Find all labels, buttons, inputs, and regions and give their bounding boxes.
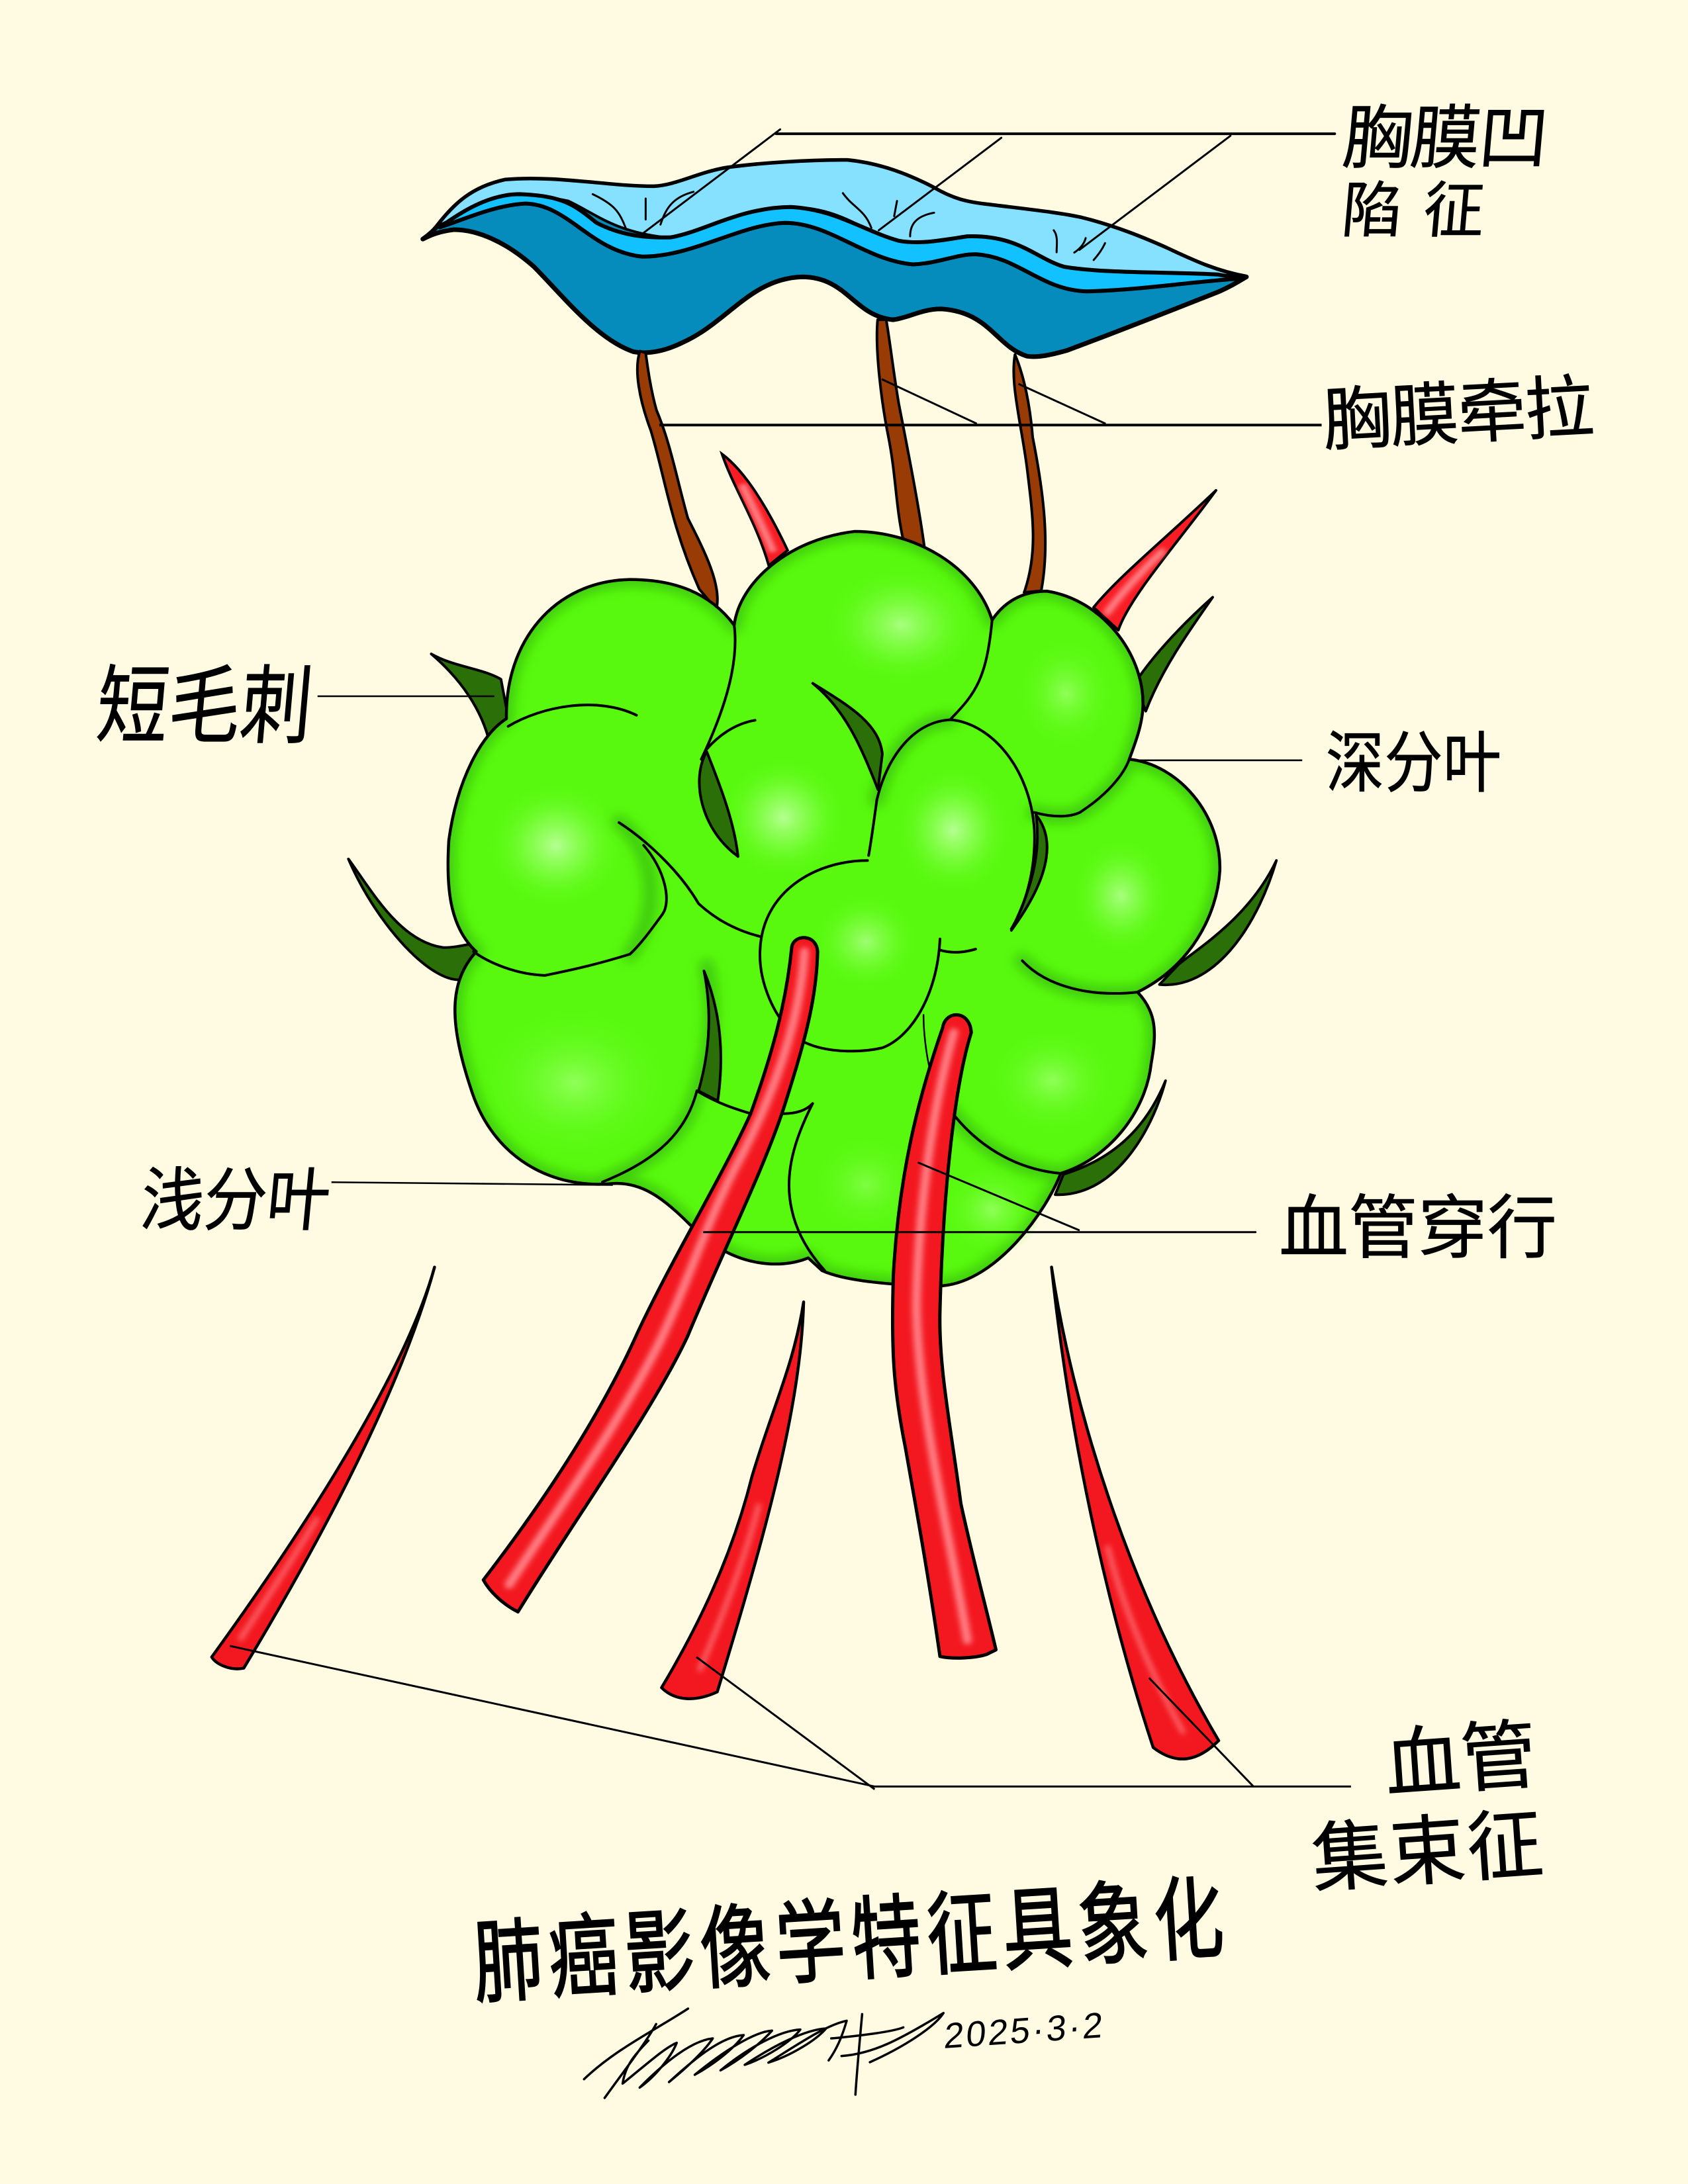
label: vessel convergence sign [1303,1713,1546,1903]
vessel A [212,1267,434,1669]
nodule shading [448,531,1220,1286]
label: pleural traction: 胸膜牵拉 [1321,369,1596,460]
label: vessel convergence sign: 血管 [1382,1713,1540,1808]
vessel: passing through, left [483,938,818,1612]
leader lines: lobulation and spicules [318,696,1302,1185]
date: 2025·3·2 [943,2005,1104,2056]
label: vessel passing: 血管穿行 [1279,1190,1557,1267]
vessel C [1052,1267,1219,1759]
vessel: passing through, right [892,1015,996,1658]
red spicule top right [1094,490,1216,630]
nodule outline [448,531,1220,1286]
strand centre [877,320,924,547]
tumour nodule [348,490,1276,1658]
pleural traction strands [637,320,1045,610]
pleura [423,129,1335,357]
signature [584,2009,943,2098]
label: pleural indentation [1334,100,1552,245]
label: deep lobulation: 深分叶 [1326,726,1501,801]
pleura mid band [440,194,1241,291]
label: pleural indentation: 陷征 [1339,177,1487,245]
pleura light upper surface [437,160,1246,277]
vessel B [661,1302,804,1699]
pleura outer dark layer [423,160,1246,357]
label: shallow lobulation: 浅分叶 [138,1162,334,1240]
leader lines: pleural indentation [643,129,1335,250]
red spicule above nodule [722,454,788,565]
nodule body [448,531,1220,1286]
label: vessel convergence sign: 集束征 [1309,1802,1546,1903]
nodule highlights [479,567,1170,1255]
spicules behind the nodule [348,597,1276,1195]
lobulation lines [473,620,1137,1271]
converging vessels [212,1267,1219,1759]
inner spicules [698,683,1047,1101]
label: short spicules: 短毛刺 [93,659,316,754]
strand right [1013,355,1045,592]
leader lines: vessel passing [704,1163,1256,1232]
label: pleural indentation: 胸膜凹 [1340,100,1552,177]
strand left [637,351,718,610]
leader lines: pleural traction [659,379,1322,425]
leader lines: vessel convergence [230,1646,1351,1790]
title: 肺癌影像学特征具象化 [470,1868,1227,2015]
converging vessel highlights [240,1504,1184,1733]
pleural indentation marks [592,192,1105,260]
